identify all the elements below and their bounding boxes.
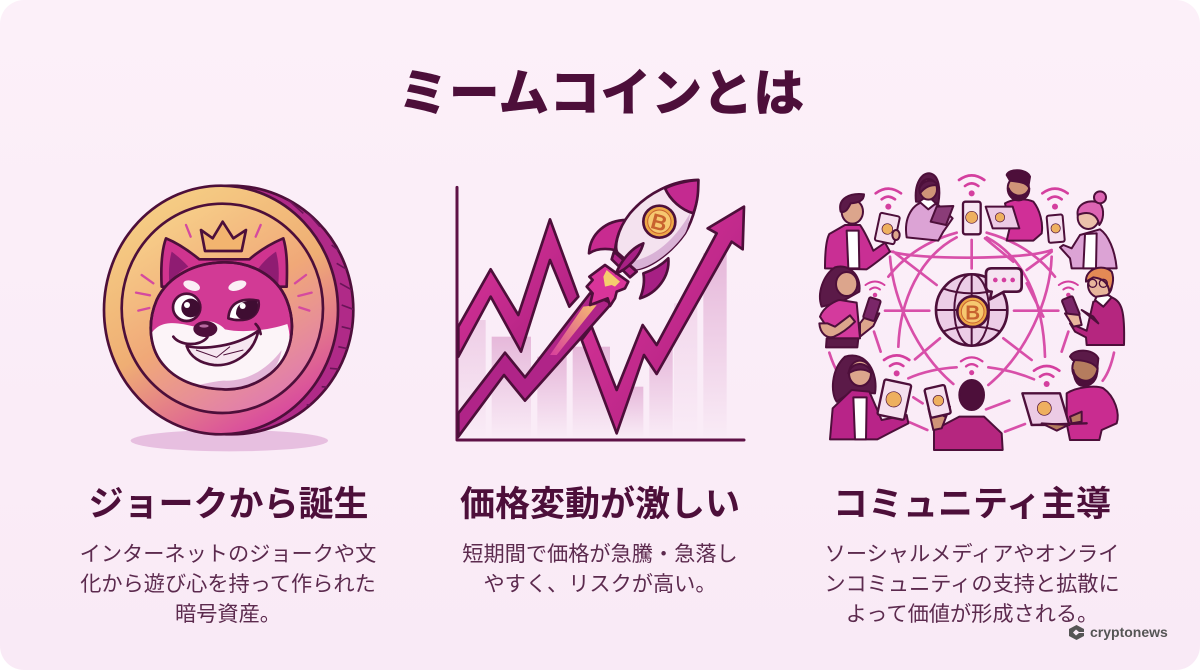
person: center phone — [963, 202, 981, 234]
eyebrows — [182, 278, 201, 293]
person: top right man — [986, 170, 1042, 241]
speech bubble — [986, 268, 1022, 299]
nose — [193, 321, 217, 337]
axes — [457, 187, 744, 440]
rocket trail — [458, 293, 612, 437]
person: top left man — [825, 194, 900, 269]
rocket: B — [648, 208, 670, 237]
wifi signals — [865, 175, 1078, 387]
person: bottom center man — [924, 380, 1003, 450]
text block: community driven: よって価値が形成される。 — [846, 602, 1098, 626]
panel: community network — [819, 170, 1124, 450]
dog head — [151, 238, 292, 389]
chart bars — [458, 253, 727, 437]
globe: B — [965, 301, 980, 324]
text block: community driven: ソーシャルメディアやオンライ — [825, 542, 1119, 566]
panel: coin illustration — [104, 186, 355, 451]
heading: joke origin: ジョークから誕生 — [88, 485, 369, 524]
coin edge — [224, 184, 355, 436]
volatile price line — [458, 219, 578, 357]
heading: community driven: コミュニティ主導 — [833, 485, 1111, 524]
heading: price volatility: 価格変動が激しい — [460, 485, 740, 524]
text block: price volatility: 短期間で価格が急騰・急落し — [462, 542, 738, 566]
rising arrow — [582, 207, 744, 433]
logo: cryptonews: cryptonews — [1090, 624, 1168, 640]
crown — [201, 222, 246, 251]
person: bottom left woman — [830, 356, 911, 439]
coin face — [104, 186, 338, 434]
text block: joke origin: 化から遊び心を持って作られた — [80, 572, 376, 596]
person: top woman — [906, 173, 953, 241]
person: left woman — [819, 266, 881, 347]
title: ミームコインとは — [398, 65, 804, 122]
network lines — [829, 233, 1114, 432]
person: right man — [1062, 268, 1124, 345]
text block: joke origin: 暗号資産。 — [175, 602, 281, 626]
text block: joke origin: インターネットのジョークや文 — [80, 542, 376, 566]
globe — [936, 274, 1007, 346]
person: top right woman — [1047, 191, 1117, 268]
eyes — [173, 294, 200, 321]
coin shadow — [131, 430, 328, 451]
text block: community driven: ンコミュニティの支持と拡散に — [824, 572, 1120, 596]
rocket — [587, 180, 698, 306]
text block: joke origin — [80, 542, 376, 626]
person: bottom right man — [1022, 351, 1118, 440]
text block: price volatility: やすく、リスクが高い。 — [483, 572, 717, 596]
rays — [136, 225, 312, 311]
mouth — [187, 331, 258, 365]
text block: community driven — [824, 542, 1120, 626]
text block: price volatility — [462, 542, 738, 596]
panel: price chart with rocket — [457, 180, 744, 440]
